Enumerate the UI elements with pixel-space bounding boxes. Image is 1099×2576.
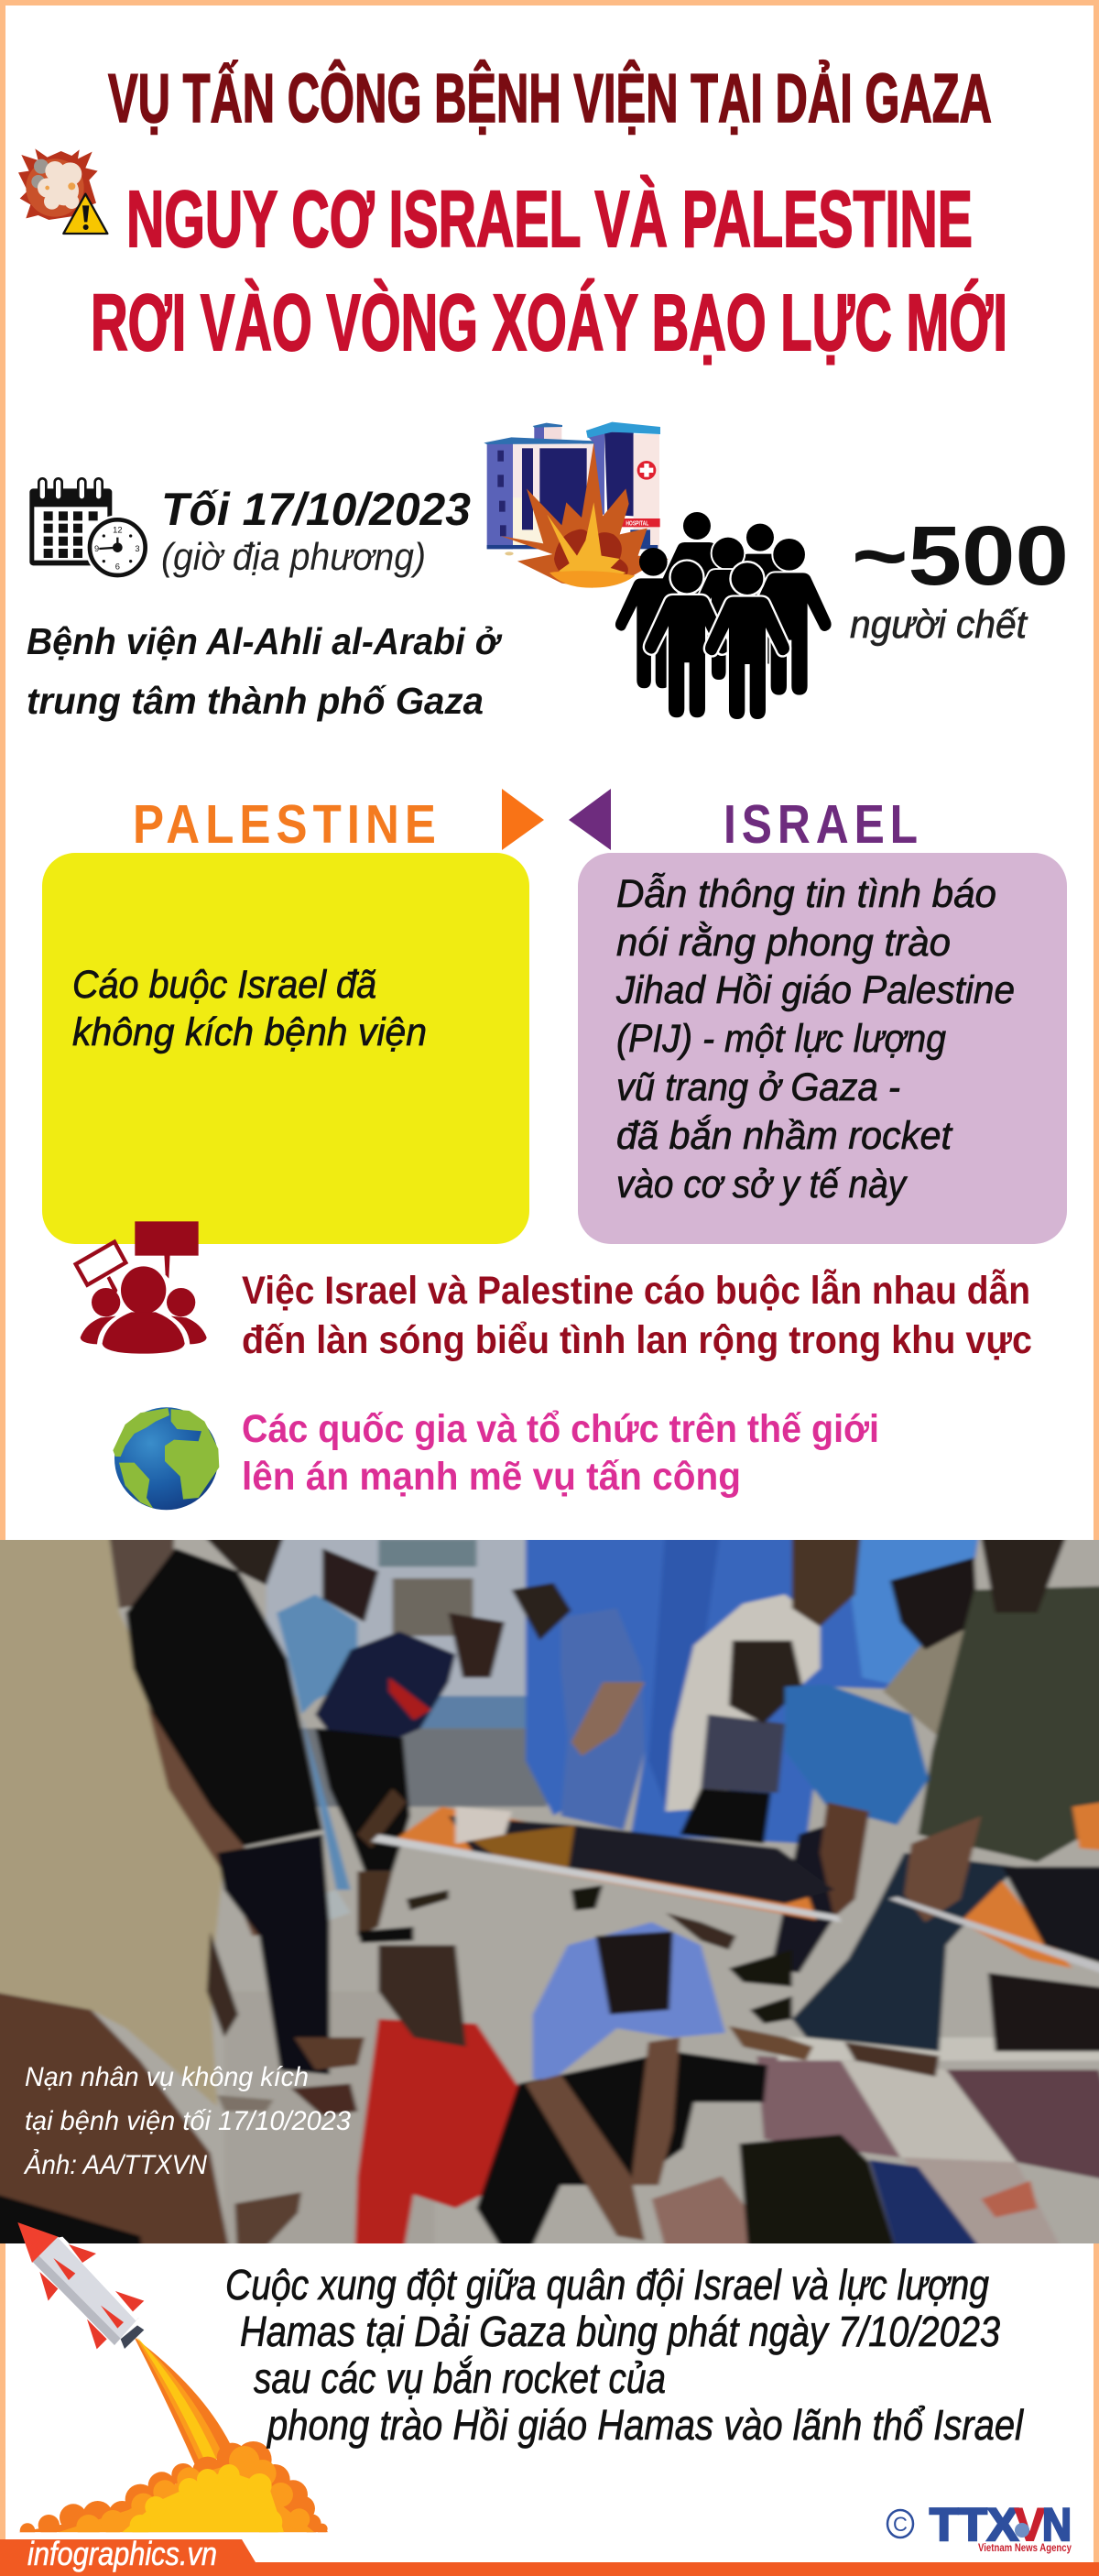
photo caption: tại bệnh viện tối 17/10/2023: [25, 2106, 351, 2136]
title: [91, 60, 1007, 367]
icon: group of people: [615, 512, 832, 719]
logo: TTXVN: TTX: [930, 2499, 1018, 2550]
death toll: [850, 509, 1069, 647]
date text: Tối 17/10/2023: [161, 484, 471, 535]
panel: Israel claim: đã bắn nhầm rocket: [616, 1114, 953, 1158]
logo: TTXVN: N: [1042, 2499, 1072, 2550]
text: world reaction: [242, 1407, 879, 1499]
text: conflict background: sau các vụ bắn rocket của: [254, 2354, 666, 2402]
photo caption: [23, 2062, 351, 2180]
icon: protest crowd: [76, 1221, 207, 1354]
icon: rocket with flame: [17, 2222, 328, 2539]
text: protests: Việc Israel và Palestine cáo buộc lẫn nhau dẫn: [242, 1268, 1030, 1313]
panel: Israel claim: Jihad Hồi giáo Palestine: [615, 968, 1015, 1012]
text: conflict background: [225, 2261, 1025, 2449]
death toll: ~500: [852, 509, 1069, 603]
icon: hospital with explosion: [484, 422, 669, 588]
icon: calendar and clock: 6: [115, 562, 120, 571]
death toll: người chết: [850, 603, 1028, 647]
photo caption: Ảnh: AA/TTXVN: [23, 2149, 207, 2180]
text: protests: đến làn sóng biểu tình lan rộng trong khu vực: [242, 1318, 1032, 1362]
panel: Israel claim: (PIJ) - một lực lượng: [616, 1017, 946, 1061]
icon: calendar and clock: 9: [94, 544, 99, 553]
date text: (giờ địa phương): [161, 535, 426, 578]
location text: [27, 620, 503, 722]
icon: calendar and clock: 3: [135, 544, 140, 553]
logo: TTXVN: [887, 2499, 1072, 2554]
panel: Israel claim: [578, 853, 1067, 1244]
icon: hospital with explosion: HOSPITAL: [626, 521, 649, 528]
text: conflict background: Hamas tại Dải Gaza bùng phát ngày 7/10/2023: [240, 2308, 1000, 2355]
photo: victims in the hospital: [0, 1507, 1099, 2276]
heading: Palestine: PALESTINE: [133, 794, 441, 855]
panel: Palestine claim: [42, 853, 529, 1244]
panel: Israel claim: vào cơ sở y tế này: [616, 1162, 908, 1206]
location text: trung tâm thành phố Gaza: [27, 680, 484, 722]
icon: blast and warning: [18, 148, 107, 234]
icon: globe: [113, 1407, 219, 1510]
date text: [161, 484, 471, 578]
logo: TTXVN: C: [893, 2513, 908, 2536]
footer bar: [0, 2535, 1099, 2576]
panel: Palestine claim: Cáo buộc Israel đã: [72, 963, 376, 1007]
arrow: purple: [569, 789, 611, 850]
location text: Bệnh viện Al-Ahli al-Arabi ở: [27, 620, 503, 662]
logo: TTXVN: V: [1015, 2499, 1046, 2550]
heading: Israel: ISRAEL: [724, 794, 923, 855]
panel: Palestine claim: không kích bệnh viện: [72, 1010, 427, 1054]
text: conflict background: Cuộc xung đột giữa quân đội Israel và lực lượng: [225, 2261, 989, 2309]
panel: Israel claim: vũ trang ở Gaza -: [616, 1065, 900, 1109]
photo caption: Nạn nhân vụ không kích: [25, 2062, 309, 2092]
panel: Israel claim: nói rằng phong trào: [616, 921, 951, 965]
logo: TTXVN: Vietnam News Agency: [978, 2541, 1072, 2554]
panel: Israel claim: Dẫn thông tin tình báo: [616, 872, 996, 916]
icon: calendar and clock: 12: [113, 525, 123, 534]
text: world reaction: lên án mạnh mẽ vụ tấn công: [242, 1455, 741, 1499]
text: protests: [242, 1268, 1032, 1362]
icon: calendar and clock: [29, 478, 150, 580]
arrow: orange: [502, 789, 544, 850]
text: world reaction: Các quốc gia và tổ chức trên thế giới: [242, 1407, 879, 1451]
footer bar: infographics.vn: [27, 2535, 217, 2572]
